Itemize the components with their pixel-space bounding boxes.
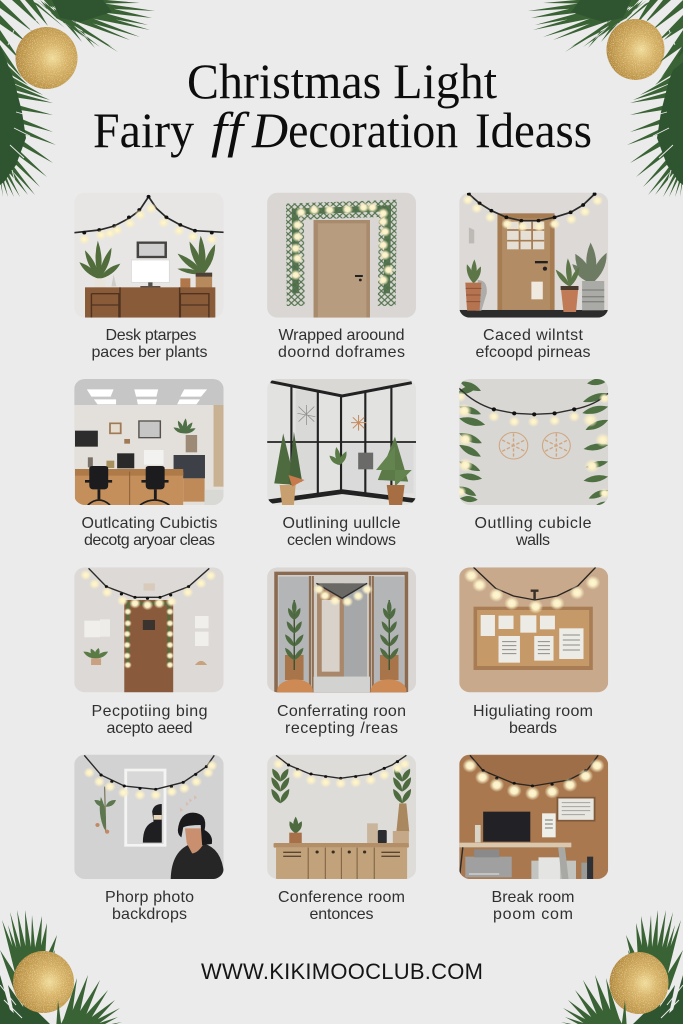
card: conference room entrance xyxy=(267,567,416,737)
caption: Caced wilntst xyxy=(483,327,584,344)
icon: gold bauble top-right xyxy=(606,19,664,80)
caption xyxy=(278,327,405,361)
card: cubicle office xyxy=(74,379,224,549)
icon: gold bauble bottom-right xyxy=(610,952,668,1014)
title: ecoration xyxy=(288,102,458,158)
illustration: garland around door xyxy=(267,193,416,318)
corner: top-right pine and gold bauble xyxy=(528,0,683,197)
caption: walls xyxy=(515,532,550,549)
caption: Outlling cubicle xyxy=(474,515,592,532)
caption: doornd doframes xyxy=(278,344,405,361)
title: Fairy xyxy=(93,102,194,158)
title: Ideass xyxy=(475,102,592,158)
corner: bottom-left pine and gold bauble xyxy=(0,910,122,1024)
card: break room xyxy=(459,755,608,923)
title: Christmas Light xyxy=(187,53,497,109)
caption xyxy=(476,327,590,361)
caption: backdrops xyxy=(112,906,187,923)
illustration: photo backdrop with person xyxy=(74,755,224,879)
caption: Outlcating Cubictis xyxy=(82,515,218,532)
illustration: cork board under string lights xyxy=(459,567,608,692)
illustration: corner windows with plants xyxy=(267,379,416,505)
illustration: framed glass doorway with plants xyxy=(267,567,416,702)
corner: top-left pine and gold bauble xyxy=(0,0,155,197)
caption: Higuliating room xyxy=(473,703,593,720)
caption xyxy=(278,889,405,923)
card: glass windows xyxy=(267,379,416,549)
card: bulletin board xyxy=(459,567,608,737)
caption xyxy=(474,515,592,549)
illustration: office desks and chairs xyxy=(74,379,224,505)
caption: ceclen windows xyxy=(287,532,396,549)
caption: paces ber plants xyxy=(92,344,208,361)
caption xyxy=(105,889,194,923)
caption xyxy=(92,703,208,737)
card: cubicle walls xyxy=(455,377,610,549)
caption: Conferrating roon xyxy=(277,703,406,720)
caption: Desk ptarpes xyxy=(106,327,196,344)
caption xyxy=(277,703,406,737)
card: photo backdrops xyxy=(74,755,224,923)
caption: poom com xyxy=(493,906,573,923)
caption: Wrapped aroound xyxy=(278,327,404,344)
illustration: desk with plants under string lights xyxy=(74,193,224,318)
card: door frames xyxy=(267,193,416,361)
illustration: break room with monitor and printers xyxy=(459,755,608,879)
illustration: door, potted plants, string lights xyxy=(459,193,610,318)
caption: Conference room xyxy=(278,889,405,906)
caption xyxy=(92,327,208,361)
caption: decotg aryoar cleas xyxy=(84,532,215,549)
caption: acepto aeed xyxy=(106,720,192,737)
caption: Phorp photo xyxy=(105,889,194,906)
caption: beards xyxy=(509,720,557,737)
card: desk plants xyxy=(74,193,224,361)
caption: Outlining uullcle xyxy=(282,515,401,532)
illustration: garland walls and hanging ornaments xyxy=(459,379,608,505)
title xyxy=(93,53,592,158)
caption: Pecpotiing bing xyxy=(92,703,208,720)
caption: efcoopd pirneas xyxy=(476,344,590,361)
title: D xyxy=(251,102,288,158)
icon: gold bauble bottom-left xyxy=(13,951,74,1013)
card: conference room entrances xyxy=(267,755,416,923)
card: reception door xyxy=(74,567,224,737)
caption: entonces xyxy=(310,906,374,923)
footer website: WWW.KIKIMOOCLUB.COM xyxy=(201,959,483,984)
title: ff xyxy=(211,102,250,158)
caption xyxy=(492,889,574,923)
caption: Break room xyxy=(492,889,574,906)
corner: bottom-right pine and gold bauble xyxy=(561,910,683,1024)
caption xyxy=(473,703,593,737)
caption: recepting /reas xyxy=(285,720,398,737)
icon: gold bauble top-left xyxy=(16,27,78,89)
illustration: sideboard with lights and leaves xyxy=(267,755,416,879)
caption xyxy=(282,515,401,549)
card: door with potted plants xyxy=(459,193,610,361)
caption xyxy=(82,515,218,549)
illustration: door with lights and notes xyxy=(74,567,224,692)
